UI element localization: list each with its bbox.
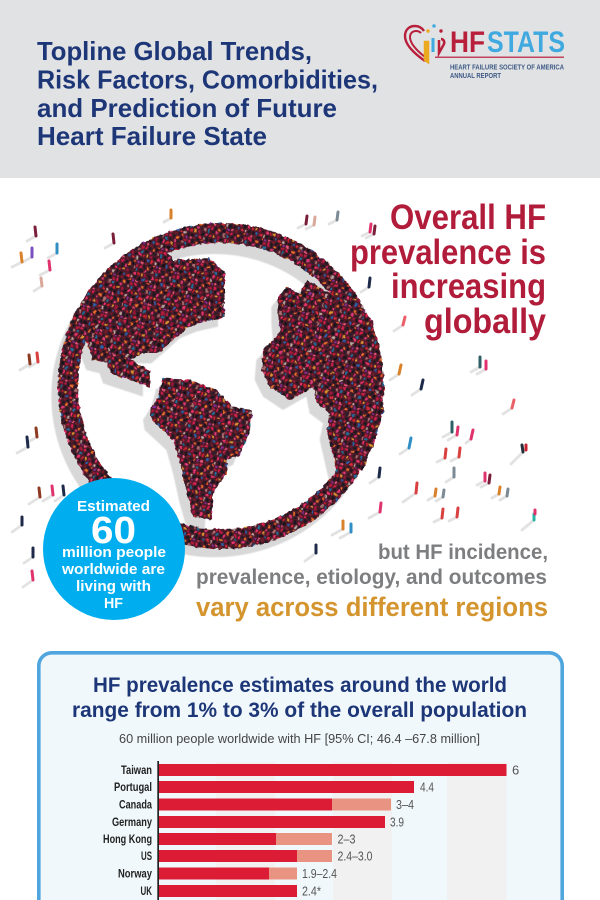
- continent: Europe, Africa, Asia: [262, 280, 384, 473]
- value labels: 4.4: [420, 780, 434, 794]
- callout text: [61, 498, 166, 612]
- value labels: [302, 762, 519, 898]
- bar chart: [103, 761, 519, 900]
- callout text: million people: [62, 544, 166, 561]
- globe ring: [68, 233, 374, 539]
- value labels: 2.4*: [302, 884, 321, 898]
- country labels: UK: [140, 886, 152, 898]
- red heading: prevalence is: [350, 233, 546, 272]
- panel heading: HF prevalence estimates around the world: [93, 674, 507, 697]
- callout text: 60: [91, 510, 136, 552]
- country labels: US: [141, 851, 152, 863]
- people figures: [21, 210, 535, 580]
- value labels: 2.4–3.0: [338, 848, 372, 864]
- value labels: 2–3: [338, 832, 356, 846]
- title: Heart Failure State: [37, 121, 267, 151]
- red heading: increasing: [391, 267, 546, 306]
- logo tagline: [450, 64, 564, 80]
- gray subheading: [196, 541, 548, 589]
- callout text: HF: [104, 595, 123, 612]
- country labels: Germany: [112, 817, 152, 829]
- scattered people: [12, 210, 535, 587]
- panel heading: [72, 674, 527, 722]
- globe shadow: [61, 245, 377, 548]
- logo tagline: ANNUAL REPORT: [450, 73, 502, 80]
- panel: prevalence estimates: [39, 653, 562, 900]
- callout text: living with: [76, 578, 151, 595]
- globe crowd shapes: [68, 233, 384, 539]
- title: and Prediction of Future: [37, 93, 337, 123]
- country labels: Hong Kong: [103, 834, 152, 846]
- callout text: Estimated: [77, 498, 150, 515]
- HFSA logo: [405, 24, 565, 80]
- value labels: 3.9: [390, 814, 404, 830]
- callout: 60 million: [43, 478, 185, 620]
- country labels: Canada: [119, 800, 152, 812]
- icon: heart of people: [405, 24, 444, 62]
- panel subtitle: 60 million people worldwide with HF [95% CI; 46.4 –67.8 million]: [119, 732, 480, 746]
- logo tagline: HEART FAILURE SOCIETY OF AMERICA: [450, 64, 564, 72]
- red heading: [350, 198, 546, 341]
- gray subheading: but HF incidence,: [378, 541, 548, 564]
- logo wordmark: [450, 26, 565, 59]
- logo wordmark: STATS: [487, 26, 565, 59]
- value labels: 6: [512, 762, 519, 778]
- light range bars: [269, 798, 391, 880]
- continent: South America: [150, 378, 252, 520]
- title: Risk Factors, Comorbidities,: [37, 64, 378, 94]
- panel background: [39, 653, 562, 900]
- callout circle: [43, 478, 185, 620]
- logo wordmark: HF: [450, 26, 485, 59]
- country labels: Portugal: [114, 782, 152, 794]
- gray subheading: prevalence, etiology, and outcomes: [196, 566, 547, 589]
- country labels: [103, 765, 152, 898]
- continent: North America: [80, 247, 225, 387]
- dark value bars: [159, 764, 506, 897]
- header band: [0, 0, 600, 178]
- globe made of crowd: [61, 233, 384, 548]
- value labels: 1.9–2.4: [302, 866, 337, 881]
- panel heading: range from 1% to 3% of the overall population: [72, 699, 527, 722]
- title: [37, 36, 378, 151]
- people shadows: [12, 218, 534, 587]
- red heading: globally: [424, 302, 546, 341]
- country labels: Norway: [118, 868, 152, 880]
- red heading: Overall HF: [390, 198, 546, 237]
- country labels: Taiwan: [121, 765, 152, 777]
- value labels: 3–4: [396, 797, 414, 812]
- title: Topline Global Trends,: [37, 36, 312, 66]
- orange subheading: vary across different regions: [196, 592, 548, 622]
- callout text: worldwide are: [61, 561, 165, 578]
